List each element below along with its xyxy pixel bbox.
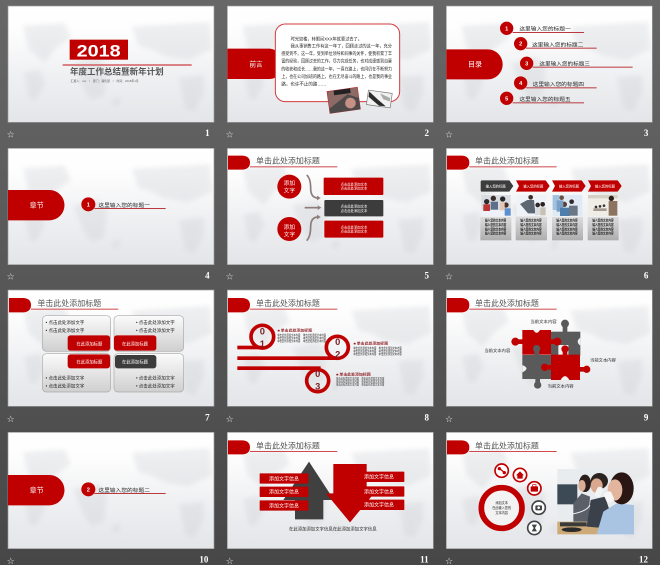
red tab [8,475,64,505]
item 5 [500,92,584,105]
item 2: 这里输入您的标题二 [532,41,583,48]
photo: handshake right [366,90,392,108]
column text: 输入您的文本内容 [485,231,507,236]
slide number: 10 [199,555,209,565]
text block 2: 单击此处添加文本内容 [353,351,376,356]
column text: 输入您的文本内容 [556,231,578,236]
gray text boxes [480,217,619,240]
column text: 输入您的文本内容 [485,226,507,231]
title bar [228,156,337,170]
big ring: 添加文本 [495,500,509,505]
panel: slide 7 quadrants [7,290,214,425]
puzzle [511,320,590,389]
text block 2: ■ 单击此处添加标题 [353,341,389,346]
chevron headers: 输入您的标题 [486,183,506,188]
puzzle labels: 当前文本内容 [590,357,616,363]
bullet lists: • 点击此处添加文字 [136,319,175,326]
ring 02: 0 [335,337,340,347]
quadrant labels: 在此添加标题 [76,358,103,365]
star icon: ☆ [445,415,453,425]
ring 01 [251,325,274,349]
left labels [260,473,308,511]
text block 3: ■ 单击此处添加标题 [336,371,371,376]
circle: bottom: 添加 [284,223,295,231]
photo 1 [481,195,511,216]
red pieces [511,330,590,380]
icon: briefcase [528,482,541,495]
item 2: 这里输入您的标题二 [98,487,150,494]
column text [485,218,614,236]
item 5: 5 [505,96,508,102]
column text: 输入您的文本内容 [592,226,614,231]
chevron headers: 输入您的标题 [595,183,616,188]
puzzle labels: 当前文本内容 [548,383,574,389]
title bar: 单击此处添加标题 [256,298,320,308]
item 5: 这里输入您的标题五 [519,96,571,103]
circle: top [277,175,301,199]
panel: slide 3 contents [445,6,652,140]
column text: 输入您的文本内容 [520,231,542,236]
text block 2: 单击此处添加文本内容 [353,345,376,350]
title bar [447,156,557,170]
paragraph: 路，也许不止的路…… [281,81,326,88]
title bar: 单击此处添加标题 [475,440,539,450]
column text: 输入您的文本内容 [556,222,578,227]
text block 3: 单击此处添加文本内容 [361,379,384,384]
box: middle: 点击此处添加文本 [341,203,368,208]
title bar [228,440,337,454]
star icon: ☆ [226,415,234,425]
slide number: 6 [644,270,649,280]
slide number: 3 [644,128,649,138]
slide number: 11 [420,555,429,565]
chevron headers [481,180,622,192]
item 3: 这里输入您的标题三 [539,61,590,68]
panel: slide 2 preface [226,6,433,140]
bullet lists [46,319,175,390]
item 3 [520,57,633,70]
right labels: 添加文字信息 [364,502,394,509]
ring 03: 0 [315,369,320,379]
left labels: 添加文字信息 [269,489,299,496]
box: top: 点击此处添加文本 [341,186,368,191]
big ring: 文本内容 [495,510,509,515]
column text: 输入您的文本内容 [485,222,507,227]
red tab [8,190,64,220]
panel: slide 1 cover [7,6,214,140]
item 1: 1 [505,26,508,32]
text block 1: 单击此处添加文本内容 [277,338,300,343]
column text: 输入您的文本内容 [556,226,578,231]
slide number: 5 [424,270,429,280]
column text: 输入您的文本内容 [592,218,614,223]
box: top [324,178,383,195]
star icon: ☆ [7,130,15,140]
star icon: ☆ [226,130,234,140]
text block 3: 单击此处添加文本内容 [361,376,384,381]
chevron headers: 输入您的标题 [559,183,580,188]
item 3: 3 [525,61,528,67]
paragraph: 时光如梭，转眼间XXX年就要过去了。 [291,35,362,42]
year badge: 2018 [77,42,121,61]
bullet lists: • 点击此处添加文字 [46,374,85,381]
text block 1: 单击此处添加文本内容 [277,332,300,337]
star icon: ☆ [445,130,453,140]
bullet lists: • 点击此处添加文字 [46,327,85,334]
text block 1: 单击此处添加文本内容 [277,335,300,340]
column text: 输入您的文本内容 [485,218,507,223]
star icon: ☆ [7,415,15,425]
text block 3: 单击此处添加文本内容 [336,382,359,387]
down arrow [326,464,374,522]
slide number: 7 [205,413,210,423]
icon: camera [532,501,545,514]
item 2 [81,482,166,496]
text block 3: 单击此处添加文本内容 [361,382,384,387]
text block 3: 单击此处添加文本内容 [336,376,359,381]
paragraph: 上，也在公司加班的路上，也在无尽奋斗的路上，也是我的事业 [281,73,393,80]
title bar: 单击此处添加标题 [475,298,539,308]
big ring [481,488,522,528]
photo 4 [588,195,618,216]
gray pieces [522,320,580,389]
box: middle [324,200,383,216]
title bar: 单击此处添加标题 [256,156,320,166]
left labels: 添加文字信息 [269,502,299,509]
box: top: 点击此处添加文本 [341,182,368,187]
puzzle labels: 当前文本内容 [484,347,510,353]
red tab [446,49,503,79]
paragraph: 感受到不，这一年，受到单位领导和同事的关怀，使我积累了丰 [281,50,393,57]
right labels: 添加文字信息 [364,474,394,481]
box: middle: 点击此处添加文本 [341,208,368,213]
bullet lists: • 点击此处添加文字 [136,374,175,381]
puzzle labels [484,318,616,389]
notches in gray [558,338,580,355]
right labels [358,472,404,510]
panel: slide 11 opposing arrows [226,432,433,565]
big ring: 在此输入您的 [492,505,511,510]
bars [237,346,336,370]
white notches [522,330,569,380]
title bar: 单击此处添加标题 [37,298,101,308]
icon: key [495,464,508,477]
up arrow [283,462,334,519]
icon: house [513,468,527,482]
circle: top: 文字 [284,186,295,194]
item 4: 4 [519,81,523,87]
panel: slide 5 flow [226,148,433,283]
circle: bottom: 文字 [284,230,295,238]
photo: operators on phones [557,469,634,534]
text block 3 [336,371,384,387]
arrows [305,175,321,241]
rounded text box [275,24,400,102]
item 1: 这里输入您的标题一 [519,25,571,32]
paragraph: 的收获和成长……我的这一年，一直在路上，也同仍在不断努力 [281,65,392,72]
text block 2: 单击此处添加文本内容 [379,348,402,353]
item 1: 这里输入您的标题一 [98,202,150,209]
slide number: 8 [424,413,429,423]
item 4: 这里输入您的标题四 [533,81,584,88]
gray knob over red [533,345,540,355]
paragraph [281,35,393,88]
panel: slide 9 puzzle [445,290,652,425]
photo: handshake left [327,87,360,113]
item 4 [514,76,597,90]
text block 2: 单击此处添加文本内容 [379,345,402,350]
slide number: 1 [205,128,210,138]
title bar: 单击此处添加标题 [256,440,320,450]
star icon: ☆ [7,273,15,283]
slide number: 12 [639,555,649,565]
column text: 输入您的文本内容 [556,218,578,223]
box: bottom: 点击此处添加文本 [341,229,368,234]
cover title: 年度工作总结暨新年计划 [70,67,164,77]
slide number: 4 [205,270,210,280]
cover subtitle: 汇报人：xxx / 部门：销售部 / 时间：2018年1月 [71,78,139,83]
paragraph: 我从事销售工作有这一年了，回顾走过的这一年，充分 [291,42,393,49]
item 1 [81,197,166,211]
text block 3: 单击此处添加文本内容 [336,379,359,384]
text block 1: 单击此处添加文本内容 [303,332,326,337]
bullet lists: • 点击此处添加文字 [136,327,175,334]
title bar [447,298,557,312]
column text: 输入您的文本内容 [520,218,542,223]
column text: 输入您的文本内容 [592,222,614,227]
title bar [228,298,337,312]
panel: slide 10 section [7,432,214,565]
quadrant labels: 在此添加标题 [76,341,103,348]
text block 2: 单击此处添加文本内容 [353,348,376,353]
text block 2 [353,341,402,356]
red tab [227,49,276,79]
item 2 [514,37,597,50]
quadrant labels: 在此添加标题 [122,341,149,348]
red tab: 章节 [30,486,44,495]
item 2: 2 [519,42,522,48]
ring 03: 3 [315,381,320,391]
bullet lists: • 点击此处添加文字 [46,383,85,390]
ring 02: 2 [335,349,340,359]
bullet lists: • 点击此处添加文字 [136,383,175,390]
column text: 输入您的文本内容 [592,231,614,236]
panel: slide 8 timeline rings [226,290,433,425]
ring 02 [326,336,348,359]
text block 1: 单击此处添加文本内容 [303,335,326,340]
left labels: 添加文字信息 [269,475,299,482]
puzzle labels: 当前文本内容 [530,318,557,324]
text block 2: 单击此处添加文本内容 [379,351,402,356]
panel: slide 12 call centre [445,432,652,565]
item 1: 1 [87,202,90,208]
title bar [9,298,118,312]
caption: 在此添加添加文字信息在此添加添加文字信息 [289,526,377,533]
title bar: 单击此处添加标题 [475,156,539,166]
red tab: 前言 [249,60,263,69]
star icon: ☆ [226,273,234,283]
star icon: ☆ [445,273,453,283]
slide number: 2 [424,128,429,138]
year badge [70,40,128,61]
panel: slide 6 team columns [445,148,652,283]
text block 1: 单击此处添加文本内容 [303,338,326,343]
right labels: 添加文字信息 [364,488,394,495]
item 1 [500,22,584,35]
red tab: 章节 [30,201,44,210]
item 2: 2 [87,487,90,493]
ring 01: 0 [260,326,265,336]
chevron headers: 输入您的标题 [523,183,544,188]
quadrant labels: 在此添加标题 [122,358,149,365]
quadrant frames [42,316,184,392]
red tab: 目录 [468,60,482,68]
photo 3 [553,195,582,216]
slide number: 9 [644,413,649,423]
circle: top: 添加 [284,179,295,187]
ring 03 [307,369,329,392]
circle: bottom [277,217,301,241]
text block 1: ■ 单击此处添加标题 [277,328,313,333]
quadrant labels [68,335,156,368]
text block 1 [277,328,326,343]
column text: 输入您的文本内容 [520,222,542,227]
ring 01: 1 [260,339,265,349]
box: bottom [324,221,383,238]
paragraph: 富的经验，回顾过去的工作，尽力完成任务，也对成绩感到自豪 [281,58,393,65]
title bar [447,440,557,454]
photo 2 [517,195,546,216]
panel: slide 4 section [7,148,214,283]
title rule [63,64,192,66]
bullet lists: • 点击此处添加文字 [46,319,85,326]
box: bottom: 点击此处添加文本 [341,224,368,229]
icon: hourglass [528,521,541,535]
column text: 输入您的文本内容 [520,226,542,231]
